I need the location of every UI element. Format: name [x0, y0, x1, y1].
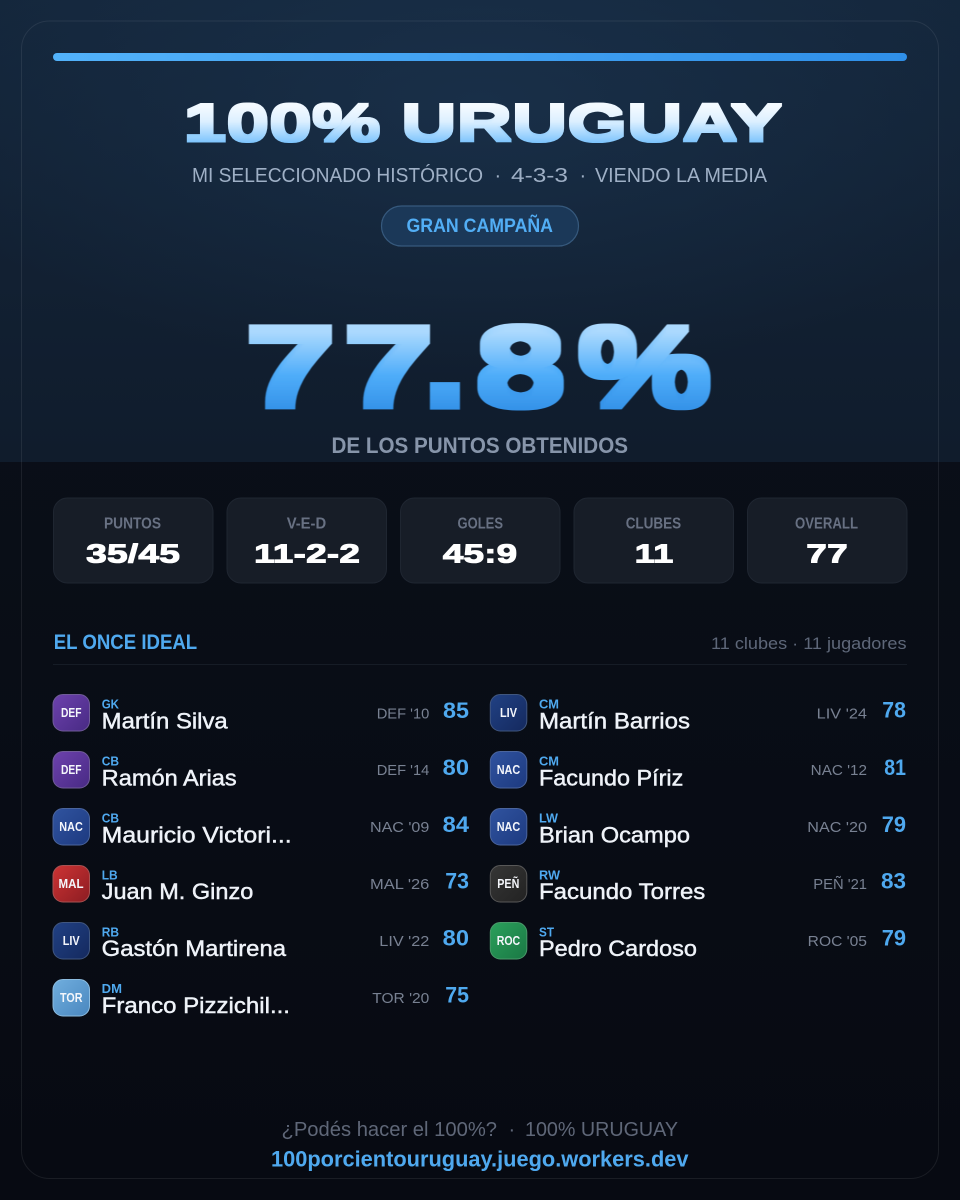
- stat: v-e-d: V-E-D: [287, 516, 326, 532]
- player: Facundo Píriz: [490, 752, 906, 790]
- player: Facundo Torres: 83: [881, 869, 906, 894]
- player: Brian Ocampo: 79: [882, 812, 906, 837]
- subtitle: MI SELECCIONADO HISTÓRICO: [192, 164, 483, 187]
- stat: goles: [400, 498, 560, 583]
- player: Facundo Píriz: NAC: [497, 763, 520, 777]
- player: Franco Pizzichil…: 75: [445, 982, 469, 1007]
- player: Juan M. Ginzo: [53, 866, 469, 904]
- hero percentage: 7: [343, 303, 434, 430]
- stats row: [54, 498, 907, 583]
- player: Martín Silva: DEF '10: [377, 705, 429, 722]
- player: Martín Silva: GK: [102, 697, 120, 712]
- player list: right column: [490, 694, 906, 961]
- hero percentage: .: [422, 281, 468, 435]
- player: Facundo Torres: [490, 866, 906, 904]
- stat: goles: 45:9: [443, 539, 517, 568]
- player: Mauricio Victori…: 84: [443, 812, 470, 837]
- hero percentage: 8: [476, 303, 565, 430]
- player: Martín Silva: [53, 694, 469, 734]
- footer tagline: ¿Podés hacer el 100%?: [282, 1119, 497, 1141]
- player: Martín Barrios: CM: [539, 697, 559, 712]
- stat: puntos: [54, 498, 213, 583]
- player: Gastón Martirena: 80: [443, 926, 469, 951]
- player: Juan M. Ginzo: Juan M. Ginzo: [102, 879, 253, 904]
- player: Mauricio Victori…: NAC: [59, 820, 83, 834]
- stat: overall: OVERALL: [795, 516, 858, 532]
- player: Facundo Píriz: Facundo Píriz: [539, 766, 683, 790]
- player: Martín Silva: 85: [443, 698, 469, 723]
- player: Facundo Píriz: NAC '12: [811, 762, 867, 779]
- player: Martín Silva: Martín Silva: [102, 709, 229, 734]
- player: Ramón Arias: DEF: [61, 763, 82, 777]
- subtitle: [192, 164, 768, 187]
- player: Ramón Arias: DEF '14: [377, 762, 429, 779]
- hero percentage: [245, 281, 711, 435]
- player: Mauricio Victori…: NAC '09: [370, 819, 429, 836]
- player: Pedro Cardoso: Pedro Cardoso: [539, 936, 697, 961]
- player: Facundo Torres: RW: [539, 868, 561, 882]
- player: Martín Barrios: Martín Barrios: [539, 709, 690, 734]
- stat: puntos: 35/45: [86, 539, 180, 568]
- player: Mauricio Victori…: CB: [102, 810, 119, 825]
- player: Gastón Martirena: [53, 922, 469, 961]
- player: Ramón Arias: Ramón Arias: [102, 766, 237, 790]
- player: Pedro Cardoso: ROC: [497, 934, 520, 948]
- player: Mauricio Victori…: Mauricio Victori...: [102, 822, 292, 847]
- player: Brian Ocampo: NAC '20: [807, 819, 867, 836]
- player: Martín Barrios: 78: [882, 698, 906, 723]
- footer tagline: ·: [508, 1119, 515, 1141]
- player: Brian Ocampo: [490, 808, 906, 847]
- hero percentage: %: [578, 304, 711, 431]
- player: Facundo Píriz: CM: [539, 754, 559, 768]
- subtitle: ·: [494, 165, 501, 187]
- player: Martín Barrios: LIV: [500, 706, 518, 720]
- stat: puntos: PUNTOS: [104, 516, 161, 532]
- player: Martín Silva: DEF: [61, 706, 82, 720]
- footer tagline: 100% URUGUAY: [525, 1119, 678, 1141]
- player: Juan M. Ginzo: 73: [445, 869, 469, 894]
- stat: v-e-d: [227, 498, 386, 583]
- player: Ramón Arias: CB: [102, 754, 119, 768]
- player: Pedro Cardoso: 79: [882, 926, 906, 951]
- player: Facundo Torres: PEÑ: [497, 876, 519, 891]
- player list: left column: [53, 694, 470, 1018]
- stat: overall: [748, 498, 907, 583]
- footer tagline: [282, 1119, 678, 1141]
- hero percentage: 7: [245, 303, 336, 430]
- section meta: 11 clubes · 11 jugadores: [711, 634, 906, 653]
- subtitle: VIENDO LA MEDIA: [595, 165, 768, 187]
- badge: gran campaña: GRAN CAMPAÑA: [406, 215, 553, 237]
- player: Franco Pizzichil…: TOR '20: [372, 990, 429, 1007]
- stat: overall: 77: [806, 539, 848, 568]
- player: Franco Pizzichil…: Franco Pizzichil...: [102, 993, 290, 1018]
- stat: clubes: [574, 498, 734, 583]
- player: Facundo Torres: Facundo Torres: [539, 879, 705, 904]
- footer url: 100porcientouruguay.juego.workers.dev: [271, 1146, 689, 1172]
- player: Ramón Arias: [53, 752, 469, 790]
- player: Brian Ocampo: Brian Ocampo: [539, 822, 690, 847]
- player: Juan M. Ginzo: LB: [102, 868, 118, 882]
- player: Gastón Martirena: LIV '22: [379, 933, 429, 950]
- title: 100%: [183, 94, 381, 153]
- player: Brian Ocampo: LW: [539, 810, 559, 825]
- section heading: EL ONCE IDEAL: [54, 631, 197, 654]
- player: Gastón Martirena: RB: [102, 924, 119, 940]
- player: Ramón Arias: 80: [443, 755, 469, 780]
- player: Franco Pizzichil…: DM: [102, 981, 122, 996]
- stat: v-e-d: 11-2-2: [254, 539, 360, 568]
- stat: clubes: 11: [635, 539, 673, 568]
- subtitle: 4-3-3: [511, 165, 568, 187]
- subtitle: ·: [580, 165, 586, 187]
- player: Brian Ocampo: NAC: [497, 820, 520, 834]
- stat: clubes: CLUBES: [626, 516, 681, 532]
- stat: goles: GOLES: [458, 516, 503, 532]
- player: Juan M. Ginzo: MAL: [58, 877, 84, 891]
- title: URUGUAY: [401, 93, 782, 152]
- player: Juan M. Ginzo: MAL '26: [370, 876, 429, 893]
- player: Mauricio Victori…: [53, 808, 470, 847]
- player: Facundo Píriz: 81: [884, 755, 906, 780]
- player: Gastón Martirena: LIV: [63, 934, 80, 948]
- player: Franco Pizzichil…: [53, 980, 469, 1018]
- player: Pedro Cardoso: [490, 922, 906, 961]
- title: [183, 93, 782, 153]
- player: Martín Barrios: LIV '24: [817, 705, 867, 722]
- player: Pedro Cardoso: ST: [539, 924, 554, 940]
- player: Gastón Martirena: Gastón Martirena: [102, 936, 287, 961]
- player: Pedro Cardoso: ROC '05: [808, 933, 867, 950]
- top accent bar: [53, 53, 907, 61]
- player: Martín Barrios: [490, 694, 906, 734]
- badge: gran campaña: [382, 206, 578, 246]
- player: Facundo Torres: PEÑ '21: [813, 876, 867, 893]
- hero caption: DE LOS PUNTOS OBTENIDOS: [332, 433, 628, 458]
- player: Franco Pizzichil…: TOR: [60, 991, 82, 1005]
